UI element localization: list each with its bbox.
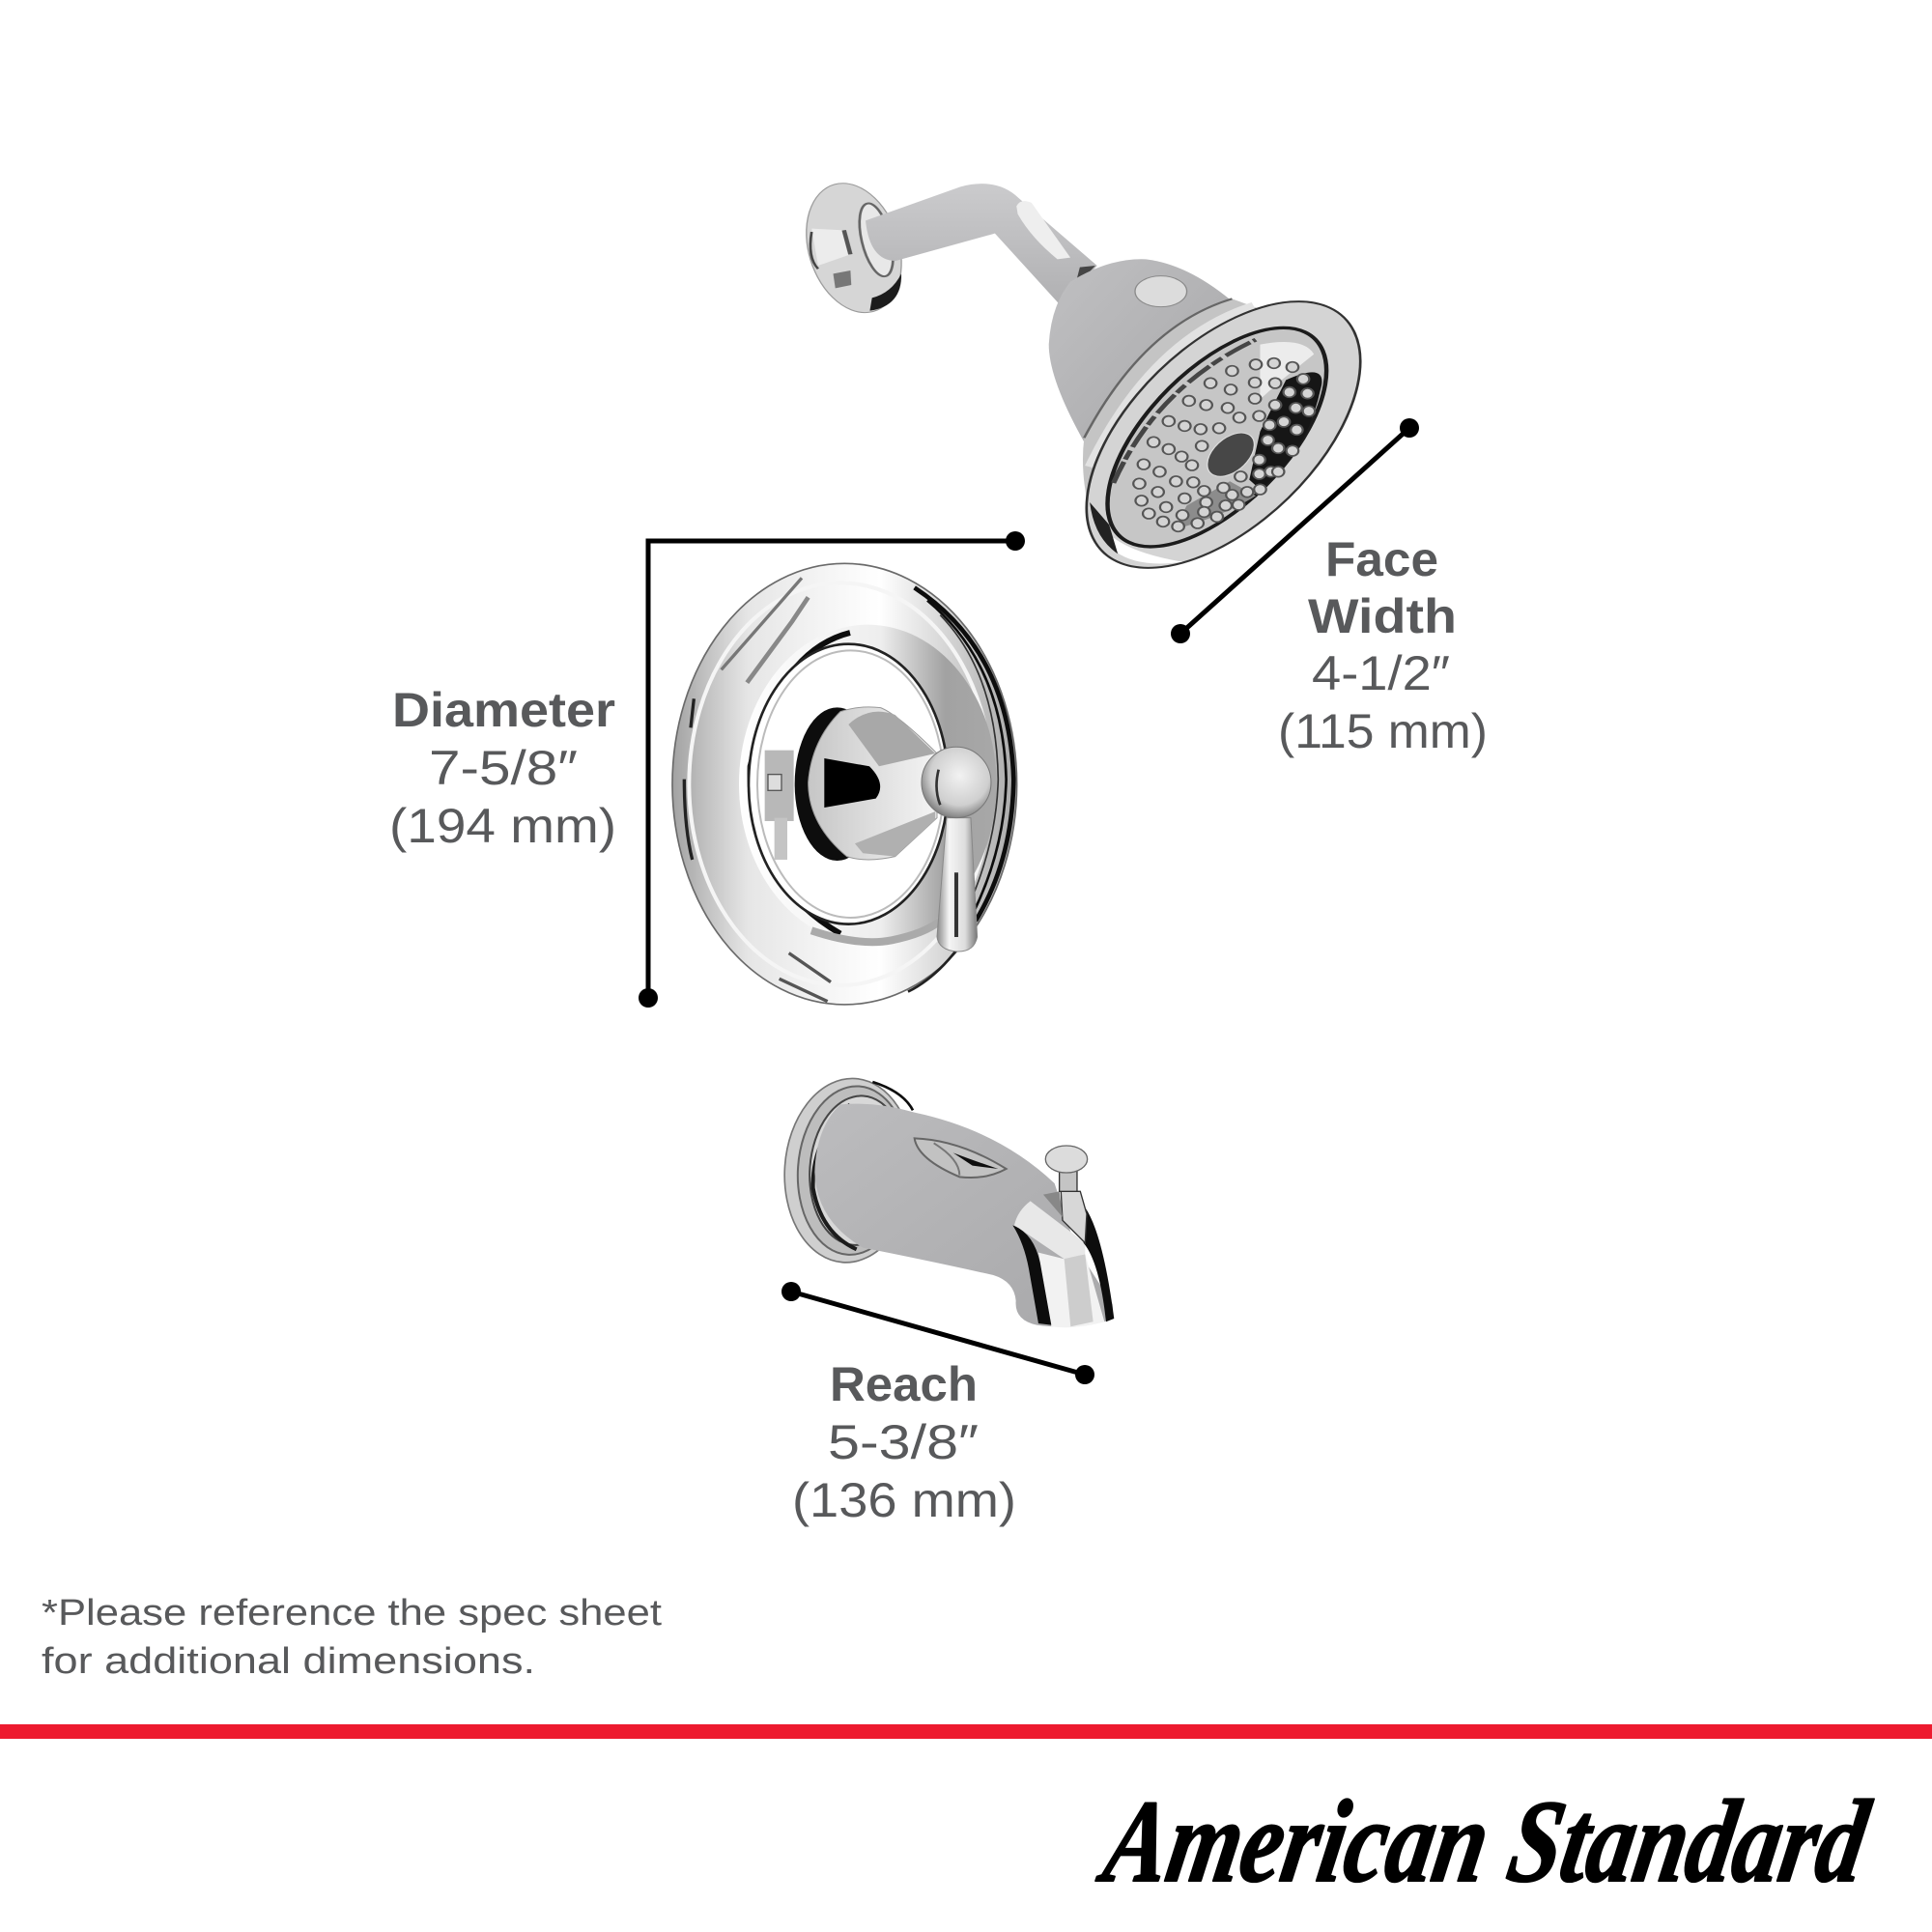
center nozzle [1198, 427, 1264, 483]
dimension line: face width [1171, 418, 1419, 643]
label: reach: 5-3/8″ [828, 1415, 979, 1469]
label: diameter: Diameter [392, 683, 615, 737]
footnote: for additional dimensions. [42, 1641, 535, 1682]
label: face width: Face [1325, 532, 1438, 586]
shower bell [1049, 259, 1236, 464]
escutcheon outer ring [672, 563, 1017, 1005]
label: reach: (136 mm) [792, 1473, 1016, 1527]
label: diameter: (194 mm) [389, 799, 616, 853]
spout body [814, 1104, 1113, 1327]
tub spout [779, 1074, 1114, 1327]
label: face width [1278, 532, 1488, 758]
diverter knob [1043, 1146, 1088, 1243]
escutcheon middle ring [739, 625, 997, 944]
dimension line: reach [781, 1282, 1094, 1384]
footnote: *Please reference the spec sheet [42, 1593, 663, 1634]
shower arm [866, 184, 1097, 306]
label: diameter: 7-5/8″ [429, 741, 578, 795]
lever handle [922, 747, 991, 952]
knob cone [809, 707, 937, 860]
label: face width: 4-1/2″ [1312, 646, 1450, 700]
footnote [42, 1593, 663, 1682]
rim bands [1083, 298, 1268, 512]
red divider bar [0, 1724, 1932, 1739]
label: reach: Reach [830, 1357, 978, 1411]
wall flange [794, 178, 914, 318]
label: reach [792, 1357, 1016, 1527]
valve trim plate and handle [672, 563, 1017, 1005]
dimension line: diameter [639, 531, 1025, 1008]
spout flange [779, 1074, 920, 1266]
inner dish [749, 644, 949, 924]
label: face width: (115 mm) [1278, 704, 1488, 758]
spout head [1012, 1146, 1114, 1327]
knob base [765, 707, 880, 861]
spray nozzles [1133, 358, 1315, 531]
shower head and arm [794, 178, 1416, 602]
label: diameter [389, 683, 616, 853]
label: face width: Width [1308, 589, 1457, 643]
shower face [1031, 268, 1416, 602]
